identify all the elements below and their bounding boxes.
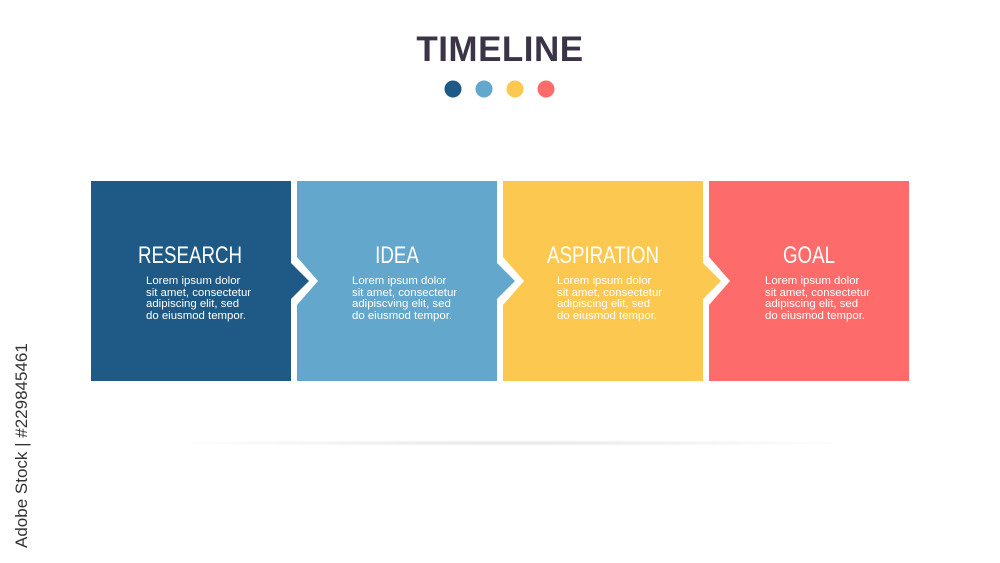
text: aspiration: adipiscing elit, sed — [557, 298, 650, 310]
box: idea — [297, 181, 515, 381]
text: idea: adipiscving elit, sed — [352, 298, 451, 310]
text: research: Lorem ipsum dolor — [146, 275, 240, 287]
text: research: do eiusmod tempor. — [146, 310, 246, 322]
text: research — [146, 275, 251, 322]
text: research: sit amet, consectetur — [146, 287, 251, 299]
heading: idea: IDEA — [375, 242, 419, 269]
text: goal — [765, 275, 870, 322]
text: goal: Lorem ipsum dolor — [765, 275, 859, 287]
text: aspiration — [557, 275, 662, 322]
stock id vertical: Adobe Stock | #229845461 — [12, 343, 31, 548]
text: idea: Lorem ipsum dolor — [352, 275, 446, 287]
text: aspiration: Lorem ipsum dolor — [557, 275, 651, 287]
text: research: adipiscing elit, sed — [146, 298, 239, 310]
heading: goal: GOAL — [783, 242, 835, 269]
text: idea: sit amet, consectetur — [352, 287, 457, 299]
text: aspiration: sit amet, consectetur — [557, 287, 662, 299]
heading: aspiration: ASPIRATION — [547, 242, 659, 269]
title: TIMELINE — [416, 30, 584, 69]
box: goal — [709, 181, 909, 381]
text: goal: sit amet, consectetur — [765, 287, 870, 299]
text: idea: do eiusmod tempor. — [352, 310, 452, 322]
text: idea — [352, 275, 457, 322]
text: goal: do eiusmod tempor. — [765, 310, 865, 322]
text: aspiration: do eiusmod tempor. — [557, 310, 657, 322]
shadow — [150, 440, 870, 446]
box: research — [91, 181, 309, 381]
heading: research: RESEARCH — [138, 242, 242, 269]
box: aspiration — [503, 181, 721, 381]
text: goal: adipiscing elit, sed — [765, 298, 858, 310]
